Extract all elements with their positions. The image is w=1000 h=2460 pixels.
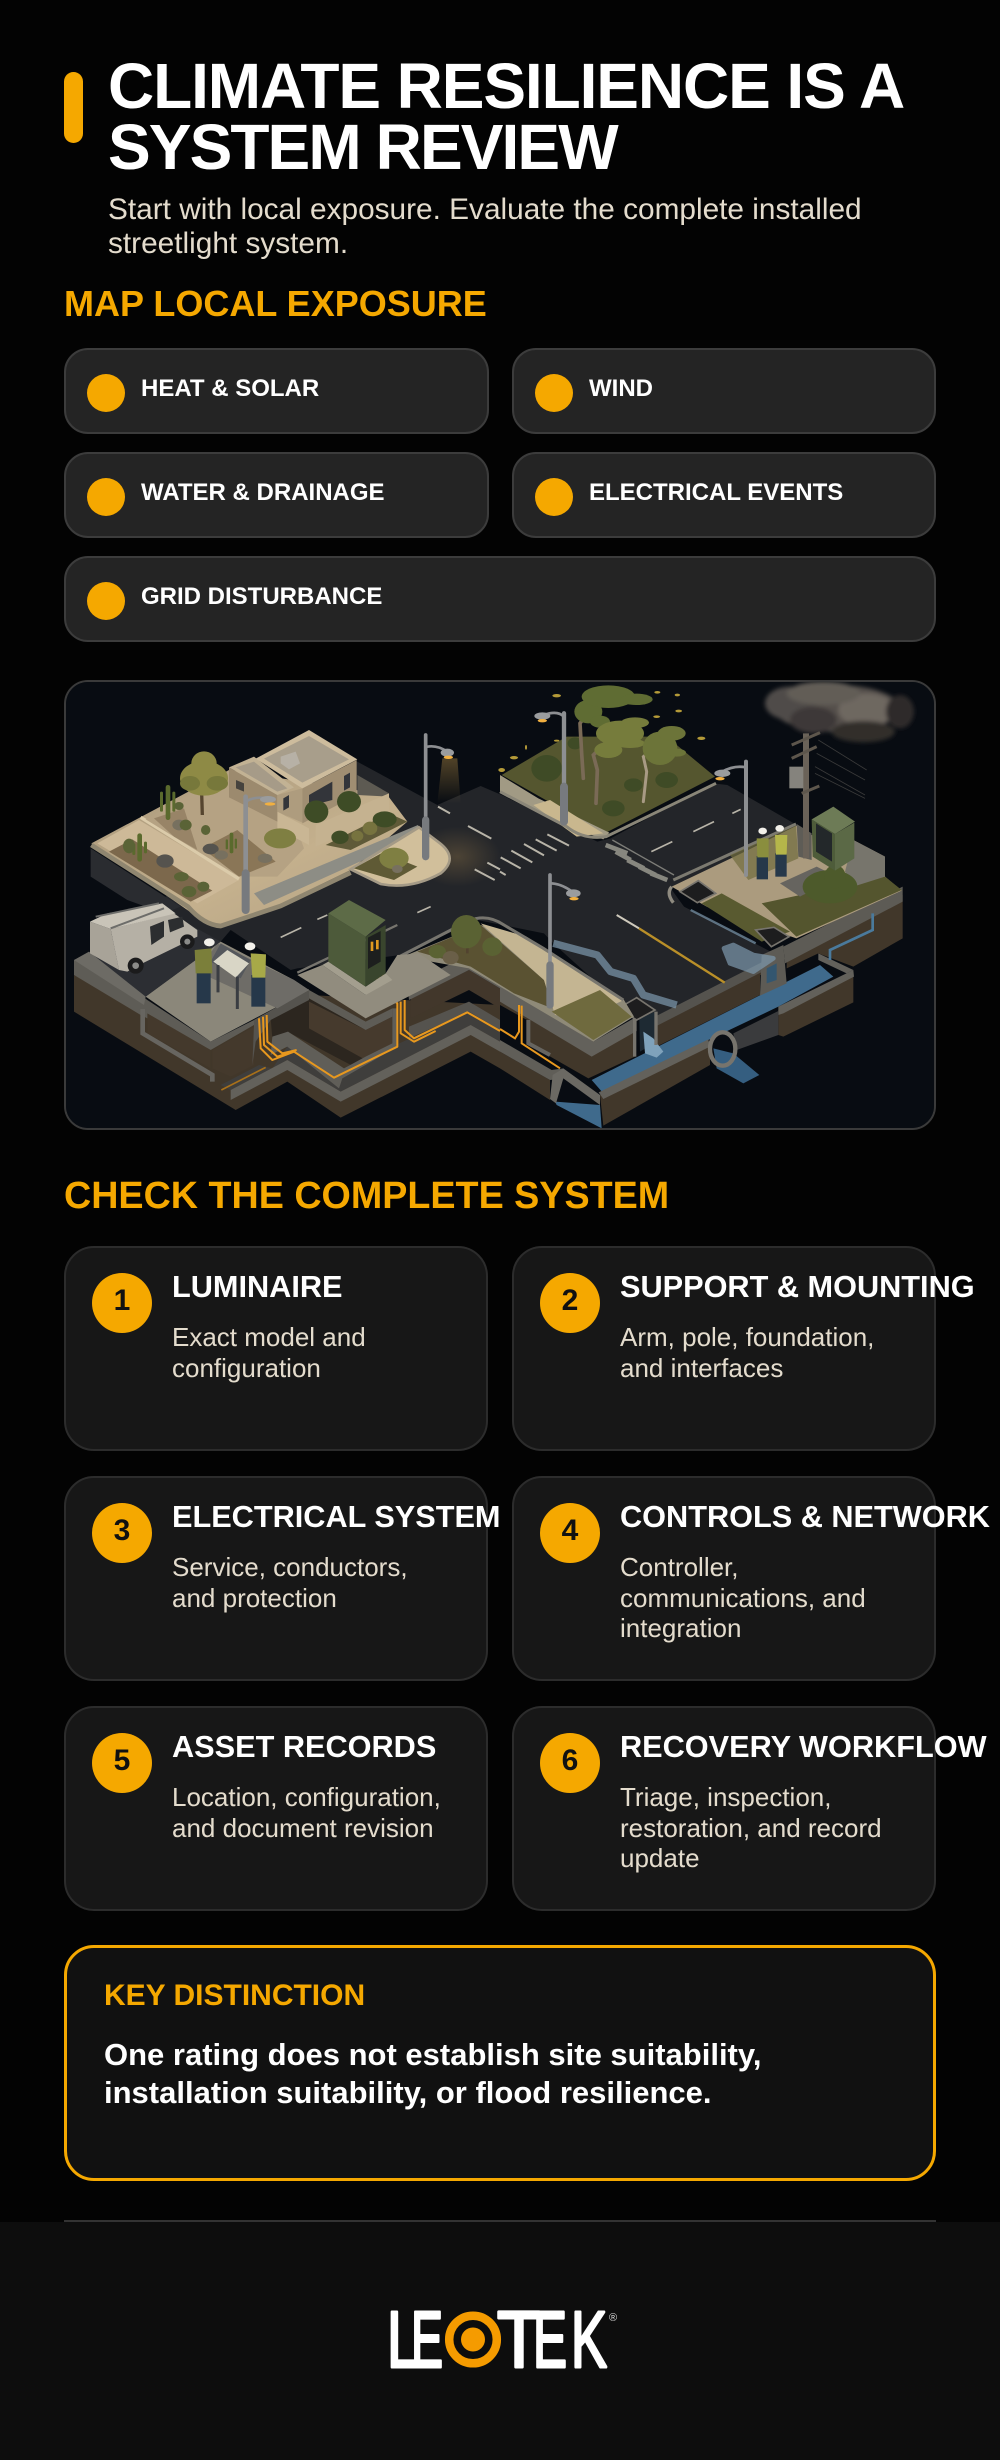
green cabinet <box>322 962 392 995</box>
card 1: luminaire: Exact model and <box>172 1322 366 1352</box>
card 2: support and mounting: and interfaces <box>620 1353 783 1383</box>
card 5: asset records <box>64 1706 488 1911</box>
card 6: recovery workflow: 6 <box>562 1744 578 1777</box>
street drain grates <box>618 881 789 1020</box>
road edge wall <box>655 958 777 1047</box>
desert plants and trees <box>123 751 409 897</box>
subtitle <box>108 193 862 260</box>
wall enclosure <box>357 775 389 797</box>
card 1: luminaire: 1 <box>114 1284 130 1317</box>
card 6: recovery workflow: RECOVERY WORKFLOW <box>620 1729 987 1764</box>
chip: wind: WIND <box>589 375 653 402</box>
card 4: controls and network: integration <box>620 1613 741 1643</box>
logo: Leotek <box>387 2300 617 2380</box>
card 3: electrical system <box>64 1476 488 1681</box>
chip: heat and solar <box>64 348 489 434</box>
card 5: asset records: ASSET RECORDS <box>172 1729 436 1764</box>
green cabinet east <box>812 819 835 871</box>
card 4: controls and network: Controller, <box>620 1552 738 1582</box>
building <box>229 767 277 822</box>
footer band <box>0 2222 1000 2460</box>
chip: heat and solar: HEAT & SOLAR <box>141 375 319 402</box>
card 1: luminaire: LUMINAIRE <box>172 1269 342 1304</box>
storm drain left <box>639 1012 656 1052</box>
card 3: electrical system: Service, conductors, <box>172 1552 408 1582</box>
right drain shaft <box>760 945 787 996</box>
callout statement <box>104 2037 761 2110</box>
callout label: KEY DISTINCTION <box>104 1979 365 2012</box>
card 6: recovery workflow: Triage, inspection, <box>620 1782 831 1812</box>
card 5: asset records: and document revision <box>172 1813 434 1843</box>
map table <box>211 943 251 978</box>
card 4: controls and network: communications, and <box>620 1583 866 1613</box>
subtitle: streetlight system. <box>108 227 348 260</box>
landscaped planter right <box>326 813 407 850</box>
NE grass block <box>498 685 716 839</box>
platform paving <box>74 900 502 1042</box>
callout statement: installation suitability, or flood resilience. <box>104 2075 711 2110</box>
sidewalk <box>97 820 239 903</box>
outfall pipe <box>713 1048 759 1083</box>
house block <box>91 730 450 926</box>
callout: key distinction <box>64 1945 936 2181</box>
card 3: electrical system: 3 <box>114 1514 130 1547</box>
underground section: drainage channel <box>500 887 903 1128</box>
east block with sidewalk and grass <box>669 824 902 942</box>
buried conduits <box>221 962 500 1090</box>
card 2: support and mounting <box>512 1246 936 1451</box>
underground section: left <box>74 955 500 1118</box>
heading: map local exposure: MAP LOCAL EXPOSURE <box>64 283 487 324</box>
utility pole and wires <box>789 733 867 871</box>
card 3: electrical system: and protection <box>172 1583 337 1613</box>
logo: Leotek: ® <box>609 2312 617 2324</box>
card 5: asset records: 5 <box>114 1744 130 1777</box>
chip: water and drainage <box>64 452 489 538</box>
van <box>90 922 119 970</box>
street lights <box>246 712 746 1005</box>
road markings <box>281 807 741 937</box>
card 2: support and mounting: SUPPORT & MOUNTING <box>620 1269 975 1304</box>
shrub and tree on south block <box>463 937 471 953</box>
chip: grid disturbance: GRID DISTURBANCE <box>141 583 382 610</box>
storm cloud <box>765 682 914 742</box>
flood water on road <box>553 910 773 1005</box>
card 1: luminaire <box>64 1246 488 1451</box>
south block with sidewalk and planter <box>297 918 634 1042</box>
panel: isometric streetscape illustration <box>64 680 936 1130</box>
card 2: support and mounting: Arm, pole, foundation, <box>620 1322 874 1352</box>
workers at pole <box>757 825 787 879</box>
lamp glow on road <box>414 827 501 887</box>
title: SYSTEM REVIEW <box>108 111 617 183</box>
card 1: luminaire: configuration <box>172 1353 321 1383</box>
card 6: recovery workflow <box>512 1706 936 1911</box>
card 3: electrical system: ELECTRICAL SYSTEM <box>172 1499 500 1534</box>
chip: grid disturbance <box>64 556 936 642</box>
card 4: controls and network <box>512 1476 936 1681</box>
chip: water and drainage: WATER & DRAINAGE <box>141 479 385 506</box>
card 6: recovery workflow: update <box>620 1843 700 1873</box>
card 2: support and mounting: 2 <box>562 1284 578 1317</box>
chip: electrical events: ELECTRICAL EVENTS <box>589 479 843 506</box>
title <box>108 50 904 183</box>
chip: wind <box>512 348 936 434</box>
workers with map <box>195 938 266 1007</box>
channel outer walls <box>600 1042 710 1126</box>
asphalt roads <box>87 762 794 1020</box>
card 4: controls and network: 4 <box>562 1514 578 1547</box>
title: CLIMATE RESILIENCE IS A <box>108 50 904 122</box>
right soil <box>787 895 903 968</box>
subtitle: Start with local exposure. Evaluate the complete installed <box>108 193 862 226</box>
callout statement: One rating does not establish site suitability, <box>104 2037 761 2072</box>
channel water <box>592 965 833 1093</box>
card 6: recovery workflow: restoration, and record <box>620 1813 882 1843</box>
corner island <box>351 827 450 886</box>
header accent bar <box>64 72 83 143</box>
card 5: asset records: Location, configuration, <box>172 1782 441 1812</box>
heading: check the complete system: CHECK THE COMPLETE SYSTEM <box>64 1174 669 1216</box>
footer divider <box>64 2220 936 2222</box>
card 4: controls and network: CONTROLS & NETWORK <box>620 1499 990 1534</box>
chip: electrical events <box>512 452 936 538</box>
